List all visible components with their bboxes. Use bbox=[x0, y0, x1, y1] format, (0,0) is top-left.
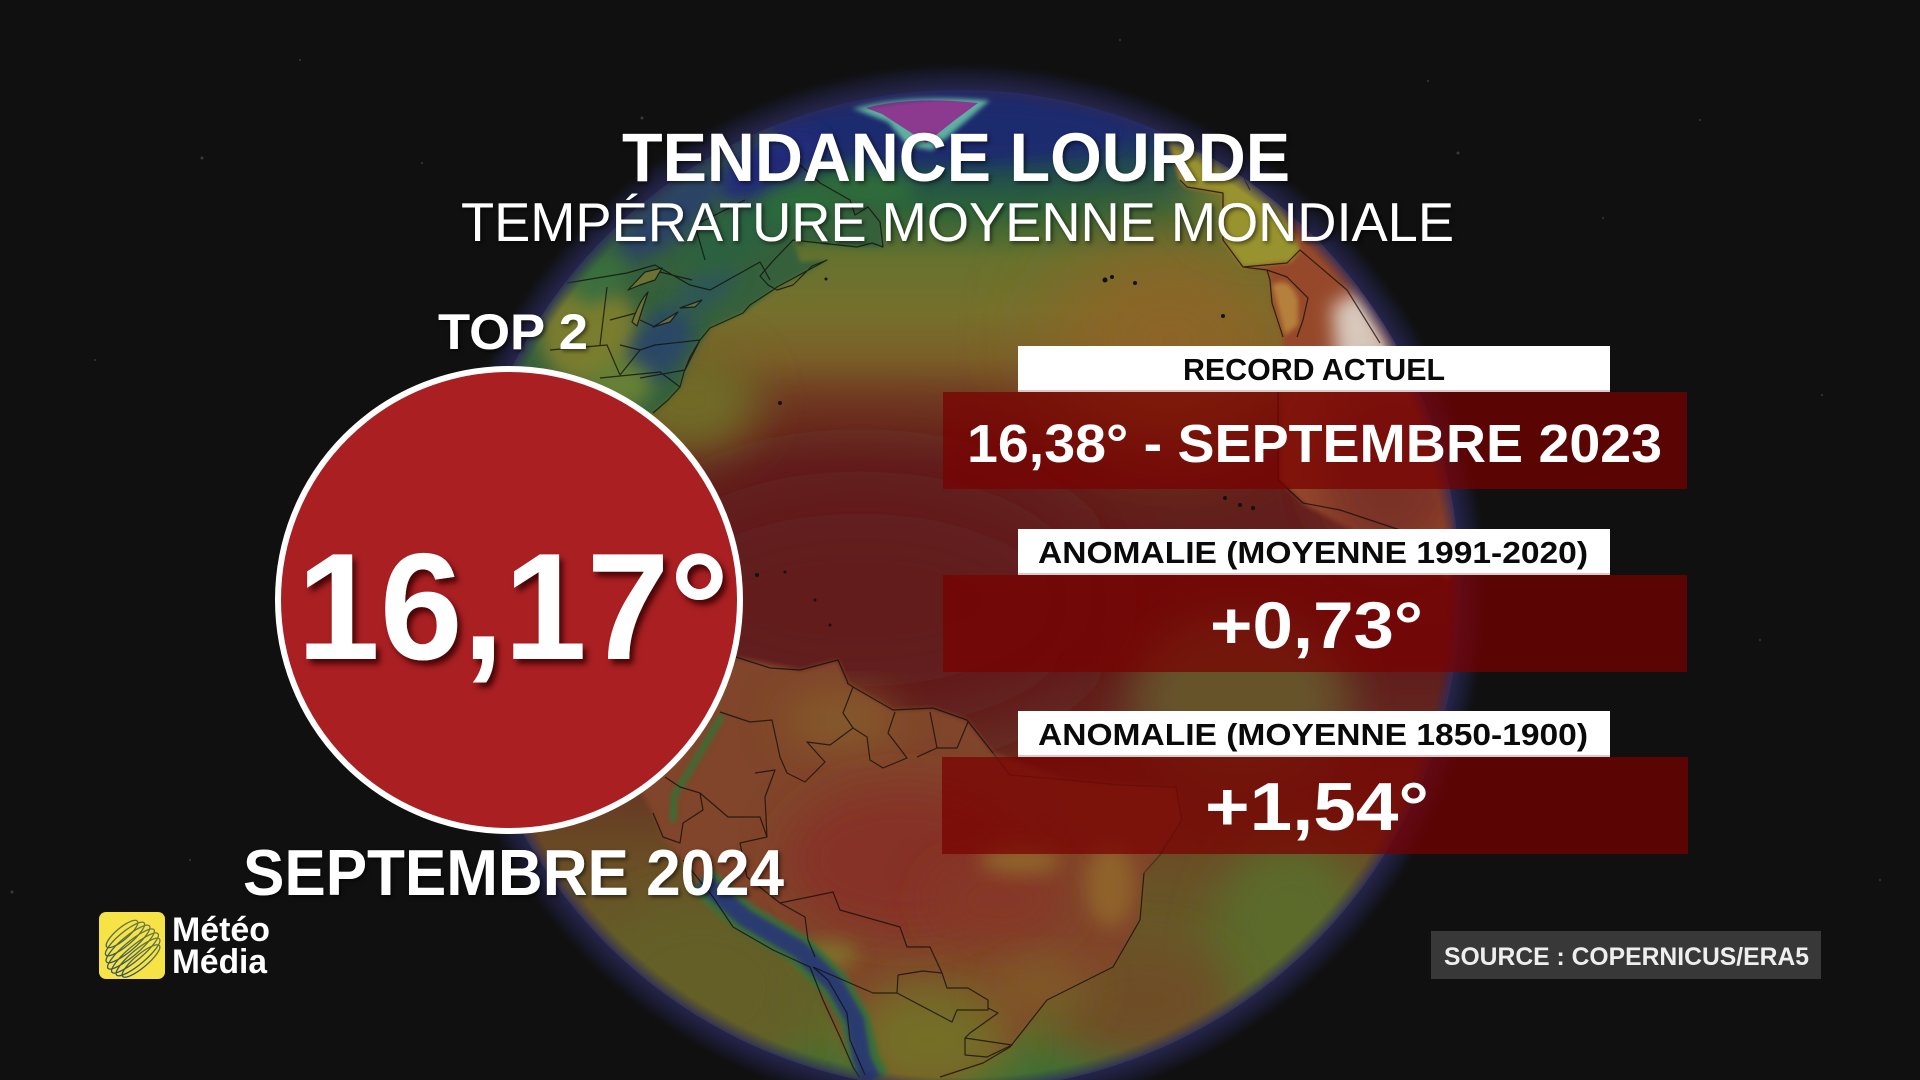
source text: SOURCE : COPERNICUS/ERA5 bbox=[1444, 943, 1809, 971]
anomaly label: ANOMALIE (MOYENNE 1850-1900) bbox=[1038, 717, 1588, 752]
anomaly label rule bbox=[1018, 755, 1610, 757]
anomaly value: +1,54° bbox=[1205, 769, 1429, 845]
ocean temperature fields bbox=[590, 100, 1370, 1080]
stars bbox=[10, 39, 1881, 894]
temperature value: 16,17° bbox=[297, 522, 729, 692]
globe halo bbox=[430, 60, 1490, 1080]
anomaly label box bbox=[1018, 711, 1610, 757]
land: North America bbox=[513, 128, 884, 415]
subtitle: TEMPÉRATURE MOYENNE MONDIALE bbox=[461, 191, 1454, 253]
record label box bbox=[1018, 346, 1610, 392]
anomaly band bbox=[942, 757, 1688, 854]
islands bbox=[755, 275, 1255, 626]
record label: RECORD ACTUEL bbox=[1183, 352, 1445, 387]
record band bbox=[943, 392, 1687, 489]
logo yellow square bbox=[99, 912, 165, 979]
anomaly band bbox=[943, 575, 1687, 672]
Greenland ice sheet bbox=[852, 97, 990, 150]
logo wordmark: Météo bbox=[172, 911, 270, 949]
rank label: TOP 2 bbox=[438, 304, 588, 360]
anomaly value: +0,73° bbox=[1210, 588, 1423, 662]
date label: SEPTEMBRE 2024 bbox=[243, 836, 784, 909]
coastlines and borders bbox=[550, 150, 1400, 1078]
panel: anomalie 1991-2020 bbox=[943, 529, 1687, 672]
panel: record actuel bbox=[943, 346, 1687, 489]
source box bbox=[1431, 931, 1821, 979]
main temperature circle bbox=[278, 369, 740, 831]
red disc bbox=[278, 369, 740, 831]
record value: 16,38° - SEPTEMBRE 2023 bbox=[967, 414, 1662, 474]
anomaly label box bbox=[1018, 529, 1610, 575]
source tag bbox=[1431, 931, 1821, 979]
land: South America bbox=[640, 657, 1182, 1080]
logo globe mark bbox=[102, 917, 164, 981]
title: TENDANCE LOURDE bbox=[622, 119, 1290, 196]
anomaly label rule bbox=[1018, 573, 1610, 575]
record label rule bbox=[1018, 390, 1610, 392]
globe temperature map bbox=[440, 90, 1480, 1080]
anomaly label: ANOMALIE (MOYENNE 1991-2020) bbox=[1038, 535, 1588, 570]
land: Europe and Africa bbox=[1166, 141, 1456, 578]
Andes bbox=[702, 880, 875, 1080]
logo wordmark: Média bbox=[172, 943, 268, 981]
logo: Météo Média bbox=[99, 911, 270, 981]
panel: anomalie 1850-1900 bbox=[942, 711, 1688, 854]
atmosphere limb bbox=[460, 90, 1460, 1080]
